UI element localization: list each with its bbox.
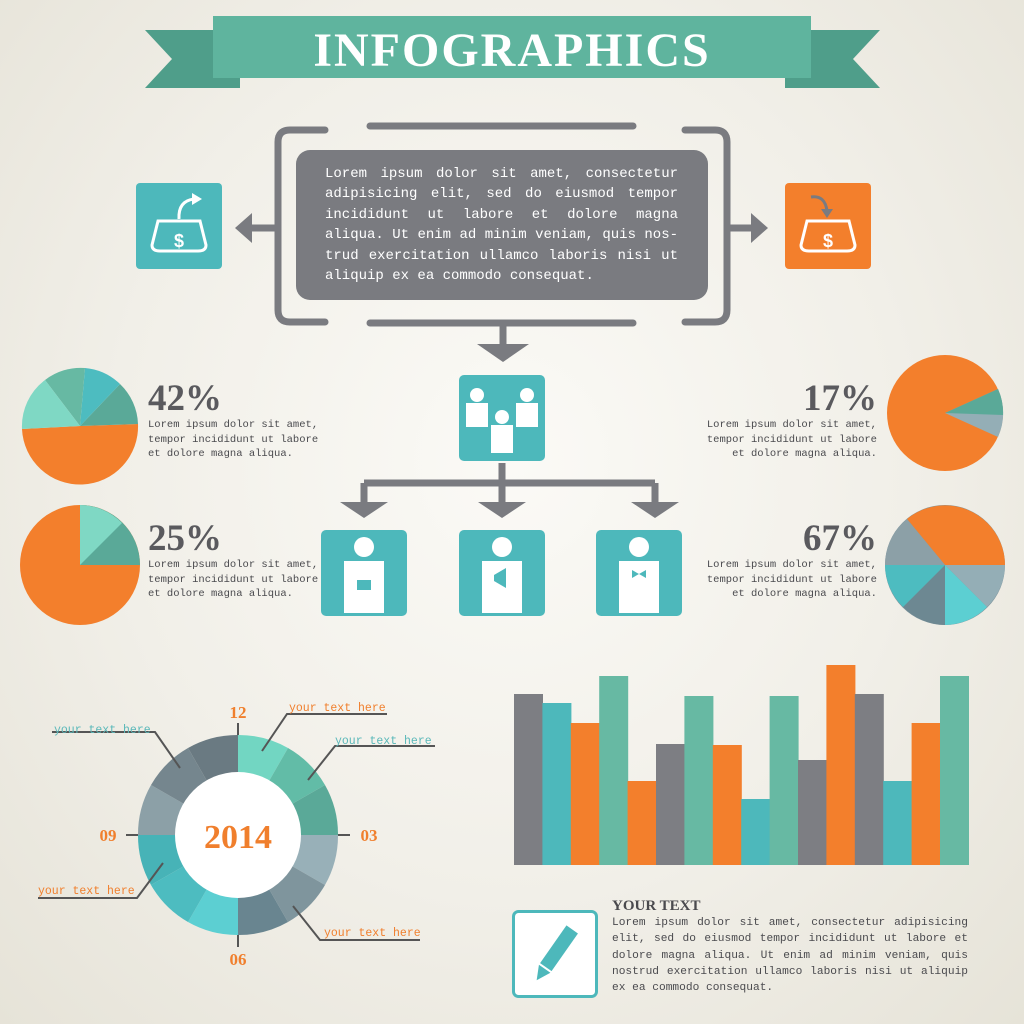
donut chart 2014: your text here: [38, 885, 135, 898]
stat 17%: tempor incididunt ut labore: [707, 434, 877, 446]
icon: money bag right: [785, 183, 871, 269]
stat 25%: 25%: [148, 518, 222, 559]
stat 17%: Lorem ipsum dolor sit amet,: [707, 419, 877, 431]
stat 67%: [707, 518, 877, 600]
donut chart 2014: 2014: [204, 819, 272, 856]
donut chart 2014: your text here: [324, 927, 421, 940]
central text block with brackets: [235, 122, 768, 362]
main paragraph: [325, 166, 678, 284]
bar chart: [514, 665, 969, 865]
stat 42%: [148, 378, 318, 460]
org chart: [321, 375, 682, 616]
icon: pencil: [512, 910, 598, 998]
icon: money bag left: $: [174, 231, 184, 251]
stat 67%: Lorem ipsum dolor sit amet,: [707, 559, 877, 571]
stat 42%: et dolore magna aliqua.: [148, 448, 293, 460]
stat 25%: [148, 518, 318, 600]
title banner: INFOGRAPHICS: [313, 24, 711, 77]
main paragraph: adipisicing elit, sed do eiusmod tempor: [325, 186, 678, 202]
main paragraph: incididunt ut labore et dolore magna: [325, 207, 678, 223]
stat 17%: 17%: [803, 378, 877, 419]
stat 42%: tempor incididunt ut labore: [148, 434, 318, 446]
donut chart 2014: 03: [360, 826, 378, 845]
donut chart 2014: your text here: [54, 724, 151, 737]
main paragraph: trud exercitation ullamco laboris nisi ut: [325, 248, 678, 264]
donut chart 2014: 12: [230, 703, 246, 722]
donut chart 2014: 06: [230, 950, 246, 969]
your text block: Lorem ipsum dolor sit amet, consectetur adipisicing elit, sed do eiusmod tempor incididunt ut labore et dolore magna aliqua. Ut enim ad minim veniam, quis nostrud exercitation ullamco laboris nisi ut aliquip ex ea commodo consequat.: [612, 917, 968, 994]
donut chart 2014: [38, 702, 435, 969]
your text block: YOUR TEXT: [612, 898, 700, 914]
icon: money bag right: $: [823, 231, 833, 251]
donut chart 2014: 09: [100, 826, 116, 845]
stat 42%: Lorem ipsum dolor sit amet,: [148, 419, 318, 431]
main paragraph: Lorem ipsum dolor sit amet, consectetur: [325, 166, 678, 182]
stat 67%: 67%: [803, 518, 877, 559]
stat 17%: [707, 378, 877, 460]
stat 25%: Lorem ipsum dolor sit amet,: [148, 559, 318, 571]
stat 42%: 42%: [148, 378, 222, 419]
stat 25%: tempor incididunt ut labore: [148, 574, 318, 586]
stat 25%: et dolore magna aliqua.: [148, 588, 293, 600]
stat 17%: et dolore magna aliqua.: [732, 448, 877, 460]
pie charts: [20, 355, 1005, 625]
title banner: [145, 16, 880, 88]
donut chart 2014: your text here: [335, 735, 432, 748]
main paragraph: aliquip ex ea commodo consequat.: [325, 268, 594, 284]
main paragraph: aliqua. Ut enim ad minim veniam, quis nos-: [325, 227, 678, 243]
stat 67%: tempor incididunt ut labore: [707, 574, 877, 586]
icon: money bag left: [136, 183, 222, 269]
donut chart 2014: your text here: [289, 702, 386, 715]
stat 67%: et dolore magna aliqua.: [732, 588, 877, 600]
